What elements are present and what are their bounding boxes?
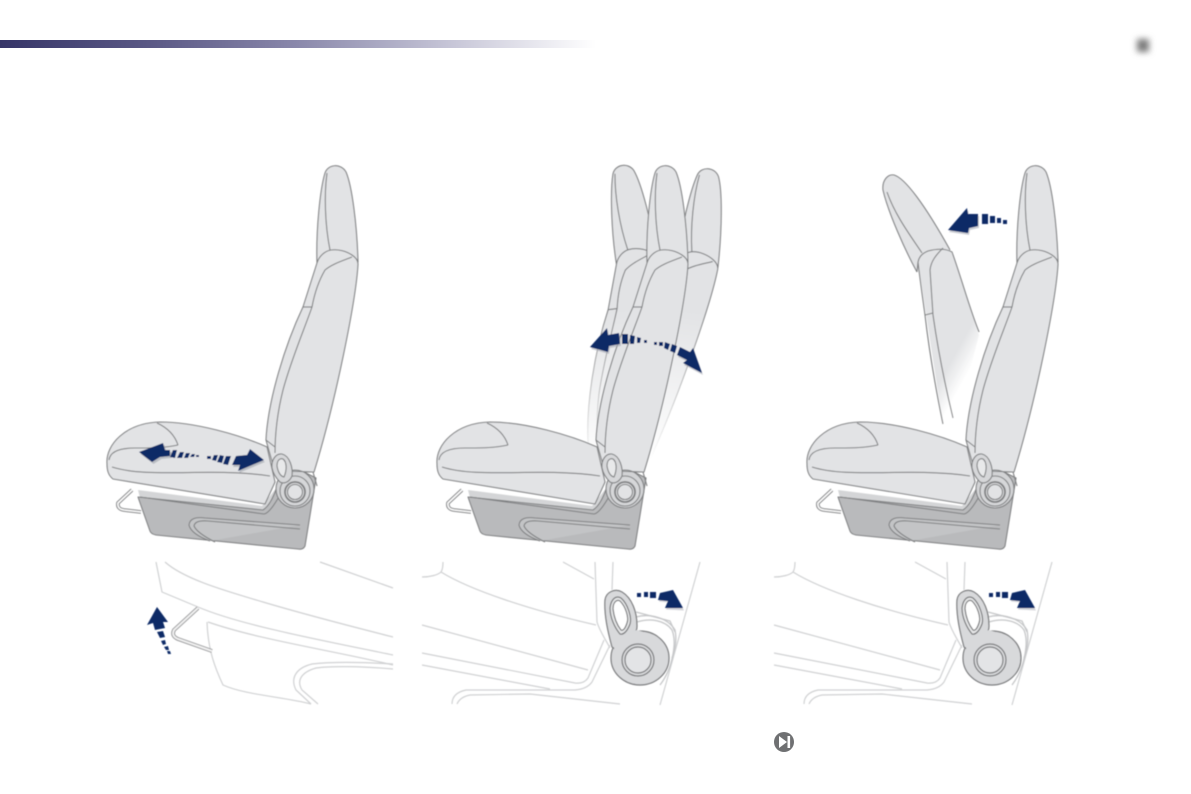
- ghost backrest tilted forward: [587, 164, 649, 442]
- detail: recline handle: [422, 562, 700, 705]
- detail: lever under seat: [147, 562, 393, 704]
- arrow: recline double curved: [590, 328, 703, 375]
- ghost backrest tilted back: [656, 168, 722, 444]
- lever: [173, 608, 212, 651]
- arrow: fold forward: [948, 208, 1007, 235]
- icon: next section button: [774, 732, 794, 752]
- panel: backrest folded forward: [807, 166, 1058, 549]
- seat and upright backrest: [437, 166, 688, 549]
- page corner marker: [1137, 39, 1149, 52]
- detail: fold handle: [774, 562, 1052, 705]
- panel: backrest recline: [437, 159, 731, 549]
- panel: seat fore-aft adjustment: [107, 166, 358, 549]
- seat and upright backrest: [807, 166, 1058, 549]
- arrow: lift lever: [147, 607, 171, 654]
- arrow: forward and back: [139, 443, 265, 473]
- ghost folded backrest: [883, 175, 979, 425]
- header gradient bar: [0, 40, 596, 48]
